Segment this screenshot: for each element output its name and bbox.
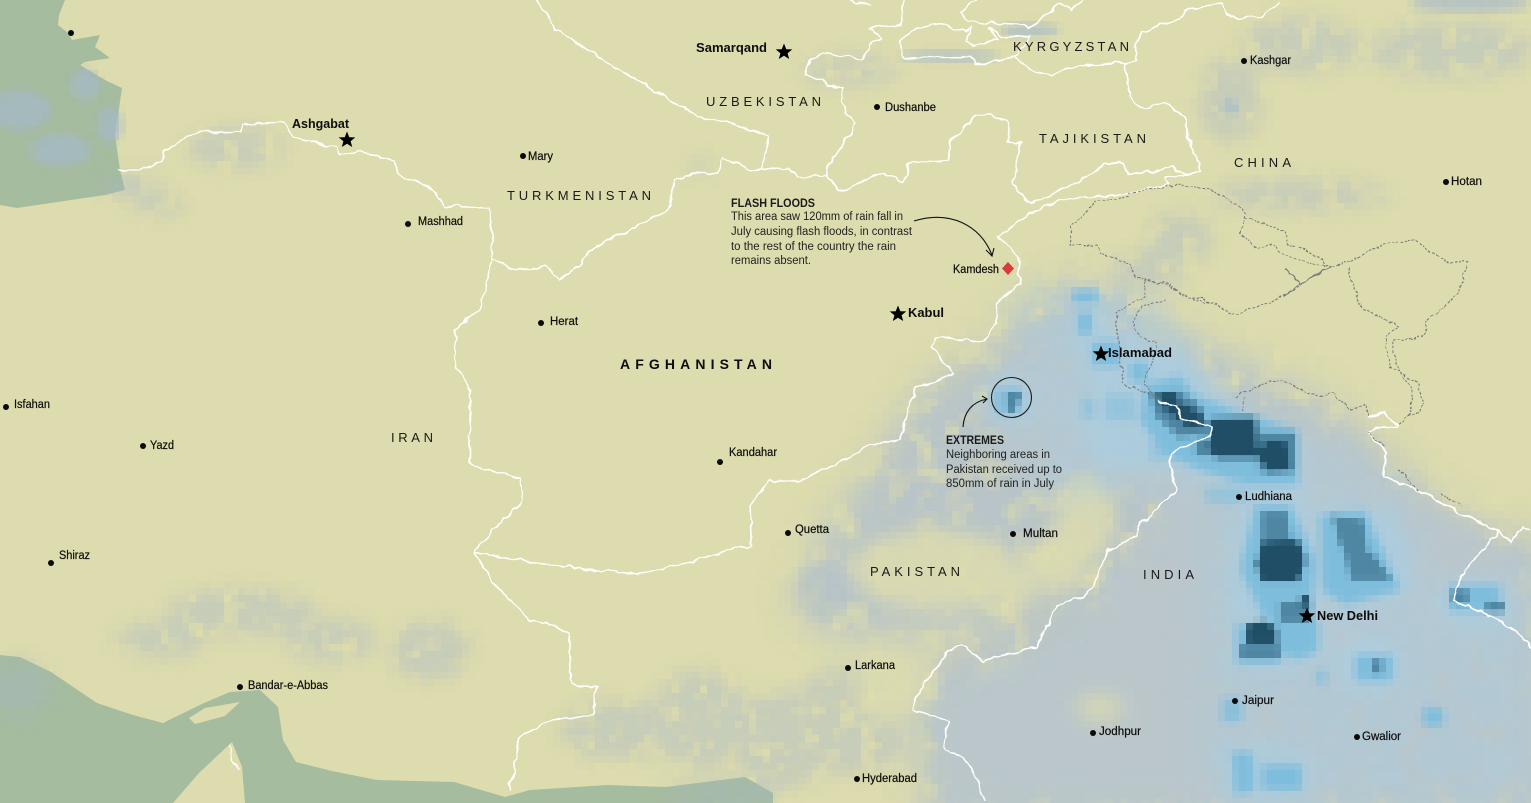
water: Persian Gulf and Arabian Sea [0,655,773,803]
capital labels: Islamabad [1108,345,1172,360]
water: Caspian Sea [0,0,125,208]
city labels: Shiraz [59,550,90,562]
extremes text: 850mm of rain in July [946,478,1054,490]
city labels: Larkana [855,660,896,672]
city labels: Mashhad [418,216,463,228]
capital labels: New Delhi [1317,608,1378,623]
rainfall: pale blue wash on the wet side [1020,300,1531,803]
flash floods text [731,211,913,267]
country labels [391,39,1291,582]
flash floods text: to the rest of the country the rain [731,241,896,253]
capital labels: Kabul [908,305,944,320]
city labels: Hotan [1451,176,1482,188]
land: Qeshm island [189,702,240,724]
country labels: AFGHANISTAN [620,356,772,372]
city labels: Multan [1023,528,1058,540]
city labels: Jodhpur [1099,726,1141,738]
city labels: Herat [550,316,579,328]
city labels: Kandahar [729,447,777,459]
rainfall: stronger northern streaks [0,0,1530,620]
rainfall: mid-teal cores [1006,390,1504,674]
country labels: TAJIKISTAN [1039,131,1146,146]
flash floods text: remains absent. [731,255,811,267]
country labels: CHINA [1234,155,1291,170]
city labels: Isfahan [14,399,50,411]
callout: flash floods [731,198,1014,276]
extremes text [946,449,1062,490]
rainfall: light blue wet halo [984,295,1510,800]
rainfall: broad grey band over Pakistan and India [790,285,1531,803]
extremes text: Neighboring areas in [946,449,1050,461]
Kamdesh label: Kamdesh [953,264,999,276]
city labels: Kashgar [1250,55,1291,67]
capital stars [339,44,1315,623]
city labels: Dushanbe [885,102,936,114]
capital labels: Ashgabat [292,116,350,131]
city labels: Quetta [795,524,830,536]
city labels: Jaipur [1242,695,1274,707]
country labels: TURKMENISTAN [507,188,651,203]
arrow: to circle [963,396,987,427]
rainfall: saturated blue patches [994,290,1500,795]
icon: Kamdesh red diamond [1002,262,1014,275]
arrow: to Kamdesh [914,217,994,256]
rainfall: solid grey base for India [930,320,1531,803]
extremes heading: EXTREMES [946,435,1004,447]
city labels: Ludhiana [1245,491,1293,503]
extremes text: Pakistan received up to [946,464,1062,476]
city labels: Gwalior [1362,731,1401,743]
country labels: UZBEKISTAN [706,94,821,109]
country labels: KYRGYZSTAN [1013,39,1129,54]
city labels: Hyderabad [862,773,917,785]
capital labels [292,40,1378,623]
capital labels: Samarqand [696,40,767,55]
country labels: INDIA [1143,567,1194,582]
flash floods text: This area saw 120mm of rain fall in [731,211,903,223]
disputed dashed boundaries [1068,185,1468,506]
highlight circle [992,378,1032,418]
flash floods heading: FLASH FLOODS [731,198,815,210]
city labels: Mary [528,151,553,163]
country labels: PAKISTAN [870,564,960,579]
rainfall: dry pockets inside the grey band [850,478,1124,725]
city labels: Bandar-e-Abbas [248,680,328,692]
callout: extremes [946,378,1062,490]
rainfall: darkest extreme cores [1158,393,1310,644]
country labels: IRAN [391,430,433,445]
flash floods text: July causing flash floods, in contrast [731,226,913,238]
city labels: Yazd [150,440,174,452]
